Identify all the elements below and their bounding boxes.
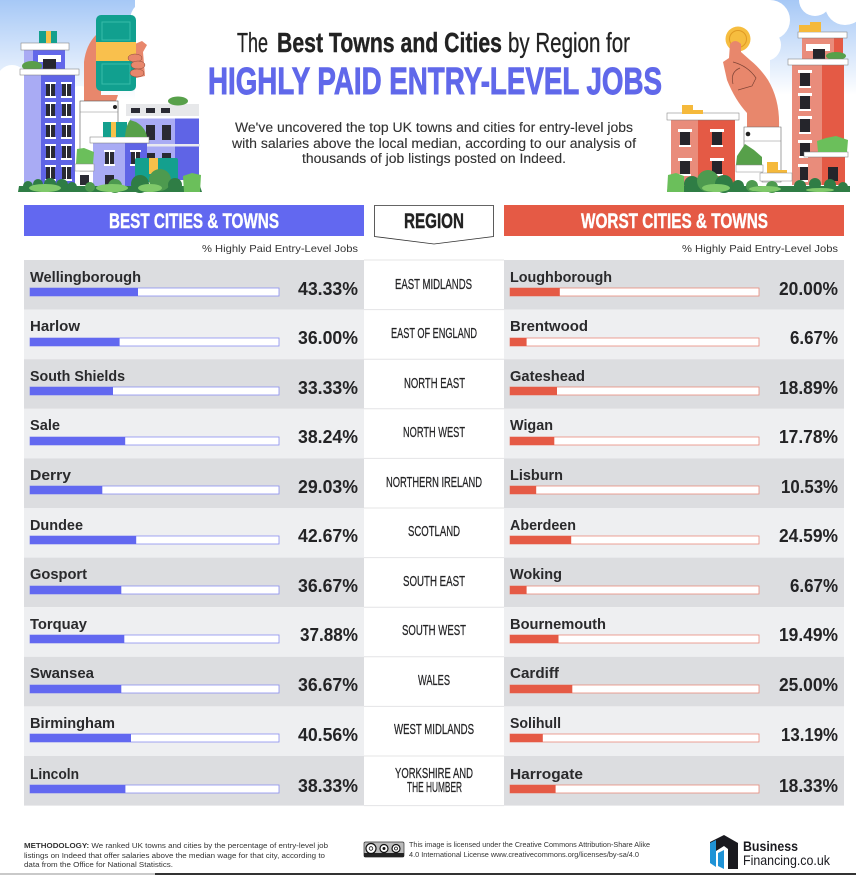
row: Solihull: Solihull [510, 715, 561, 732]
panel: worst cities and towns [510, 269, 838, 796]
intro text: We've uncovered the top UK towns and cities for entry-level jobs [235, 120, 633, 135]
row: South Shields: South Shields [30, 368, 125, 385]
row: Dundee: 42.67% [298, 526, 358, 546]
bushes, right [667, 170, 850, 193]
header: worst cities and towns [504, 205, 844, 236]
row: Sale: 38.24% [298, 427, 358, 447]
licence text [409, 842, 650, 859]
row: Gateshead: 18.89% [779, 378, 838, 398]
main heading: HIGHLY PAID ENTRY-LEVEL JOBS [208, 61, 662, 103]
row: Sale [30, 417, 358, 447]
illustration: red city with hand holding a coin [667, 0, 856, 193]
panel: region labels: EAST OF ENGLAND [391, 325, 477, 342]
hand holding banknotes [80, 15, 147, 171]
tall purple building [20, 31, 79, 185]
row: Loughborough [510, 269, 838, 299]
panel: region labels [386, 276, 482, 796]
logo: Business Financing.co.uk [710, 835, 831, 869]
row: Harlow: 36.00% [298, 328, 358, 348]
panel: region labels: EAST MIDLANDS [395, 276, 472, 293]
row: Wellingborough: 43.33% [298, 279, 358, 299]
methodology note: METHODOLOGY: We ranked UK towns and cities by the percentage of entry-level job [24, 843, 328, 850]
row: Dundee [30, 517, 358, 546]
row: Solihull: 13.19% [781, 725, 838, 745]
row: Swansea: 36.67% [298, 675, 358, 695]
row: Wellingborough: Wellingborough [30, 269, 141, 286]
header: region arrow: REGION [404, 210, 464, 233]
bottom edge [0, 873, 856, 875]
row: Brentwood: 6.67% [790, 328, 838, 348]
illustration: purple city with hand holding banknotes [0, 0, 202, 193]
row: Torquay [30, 616, 358, 645]
panel: region labels: SOUTH EAST [403, 573, 465, 590]
sky and clouds, left [0, 0, 170, 114]
panel: region labels: YORKSHIRE AND [395, 765, 473, 782]
title line: by Region for [508, 27, 630, 58]
row: Lincoln [30, 766, 358, 796]
methodology note [24, 843, 328, 869]
row: Derry [30, 467, 358, 497]
licence text: This image is licensed under the Creative Commons Attribution-Share Alike [409, 842, 650, 849]
row: Gosport [30, 566, 358, 596]
row: Wigan: Wigan [510, 417, 553, 434]
row: Harlow: Harlow [30, 318, 80, 335]
row: Wellingborough [30, 269, 358, 299]
low purple house [126, 96, 200, 180]
row: Lisburn [510, 467, 838, 497]
row: Sale: Sale [30, 417, 60, 434]
intro text [231, 120, 636, 166]
row: South Shields: 33.33% [298, 378, 358, 398]
coins and planter [736, 144, 792, 181]
row: Birmingham [30, 715, 358, 745]
title line: Best Towns and Cities [277, 27, 502, 58]
row: Wigan: 17.78% [779, 427, 838, 447]
row: Derry: 29.03% [298, 477, 358, 497]
row: Lincoln: Lincoln [30, 766, 79, 783]
row: Swansea [30, 665, 358, 695]
row: Brentwood: Brentwood [510, 318, 588, 335]
row: Torquay: Torquay [30, 616, 88, 633]
row: Bournemouth: 19.49% [779, 625, 838, 645]
panel: region labels: NORTH WEST [403, 424, 465, 441]
header: best cities and towns [24, 205, 364, 236]
row: Cardiff [510, 665, 838, 695]
methodology note: data from the Office for National Statistics. [24, 862, 173, 869]
row: Bournemouth [510, 616, 838, 645]
row: Bournemouth: Bournemouth [510, 616, 606, 633]
row: Torquay: 37.88% [300, 625, 358, 645]
row: Woking: 6.67% [790, 576, 838, 596]
panel: region labels: WEST MIDLANDS [394, 721, 474, 738]
panel: region labels: SCOTLAND [408, 523, 460, 540]
front red annex with plant [804, 136, 848, 185]
row: Derry: Derry [30, 467, 72, 484]
row: Dundee: Dundee [30, 517, 83, 534]
header: worst cities and towns: WORST CITIES & TOWNS [581, 210, 768, 233]
row: Gateshead: Gateshead [510, 368, 585, 385]
row: Harrogate [510, 766, 838, 796]
methodology note: listings on Indeed that offer salaries above the median wage for that city, according to [24, 853, 325, 860]
table background bands [24, 260, 844, 806]
row: Birmingham: 40.56% [298, 725, 358, 745]
row: Loughborough: Loughborough [510, 269, 612, 286]
logo: Business Financing.co.uk: Financing.co.uk [743, 852, 831, 868]
axis label, best column: % Highly Paid Entry-Level Jobs [202, 243, 358, 255]
row: Wigan [510, 417, 838, 447]
row: Aberdeen [510, 517, 838, 546]
panel: region labels: SOUTH WEST [402, 622, 466, 639]
row: Swansea: Swansea [30, 665, 95, 682]
licence text: 4.0 International License www.creativecommons.org/licenses/by-sa/4.0 [409, 852, 639, 859]
title line: The [237, 27, 268, 58]
hand holding a coin [723, 26, 781, 182]
sky and clouds, right [749, 0, 856, 95]
logo: Business Financing.co.uk: Business [743, 838, 798, 854]
row: Cardiff: Cardiff [510, 665, 560, 682]
row: Aberdeen: 24.59% [779, 526, 838, 546]
header: best cities and towns: BEST CITIES & TOWNS [109, 210, 279, 233]
row: Lisburn: Lisburn [510, 467, 563, 484]
tall red building [788, 22, 848, 185]
panel: region labels: NORTH EAST [404, 375, 465, 392]
row: Birmingham: Birmingham [30, 715, 115, 732]
intro text: thousands of job listings posted on Indeed. [302, 151, 566, 166]
row: Harlow [30, 318, 358, 348]
row: Gosport: 36.67% [298, 576, 358, 596]
panel: region labels: WALES [418, 672, 450, 689]
row: Aberdeen: Aberdeen [510, 517, 576, 534]
row: Lisburn: 10.53% [781, 477, 838, 497]
icon: creative commons badge [364, 842, 404, 857]
row: Woking: Woking [510, 566, 562, 583]
row: Gosport: Gosport [30, 566, 87, 583]
row: Solihull [510, 715, 838, 745]
left red building [667, 105, 739, 186]
row: Loughborough: 20.00% [779, 279, 838, 299]
intro text: with salaries above the local median, according to our analysis of [231, 136, 636, 151]
header: region arrow [374, 206, 494, 244]
axis label, worst column: % Highly Paid Entry-Level Jobs [682, 243, 838, 255]
small front house [75, 120, 178, 187]
row: Gateshead [510, 368, 838, 398]
row: Cardiff: 25.00% [779, 675, 838, 695]
row: Lincoln: 38.33% [298, 776, 358, 796]
bushes, left [18, 169, 202, 193]
row: South Shields [30, 368, 358, 398]
panel: best cities and towns [30, 269, 358, 796]
row: Harrogate: Harrogate [510, 766, 583, 783]
row: Woking [510, 566, 838, 596]
row: Brentwood [510, 318, 838, 348]
row: Harrogate: 18.33% [779, 776, 838, 796]
panel: region labels: THE HUMBER [407, 779, 462, 796]
panel: region labels: NORTHERN IRELAND [386, 474, 482, 491]
